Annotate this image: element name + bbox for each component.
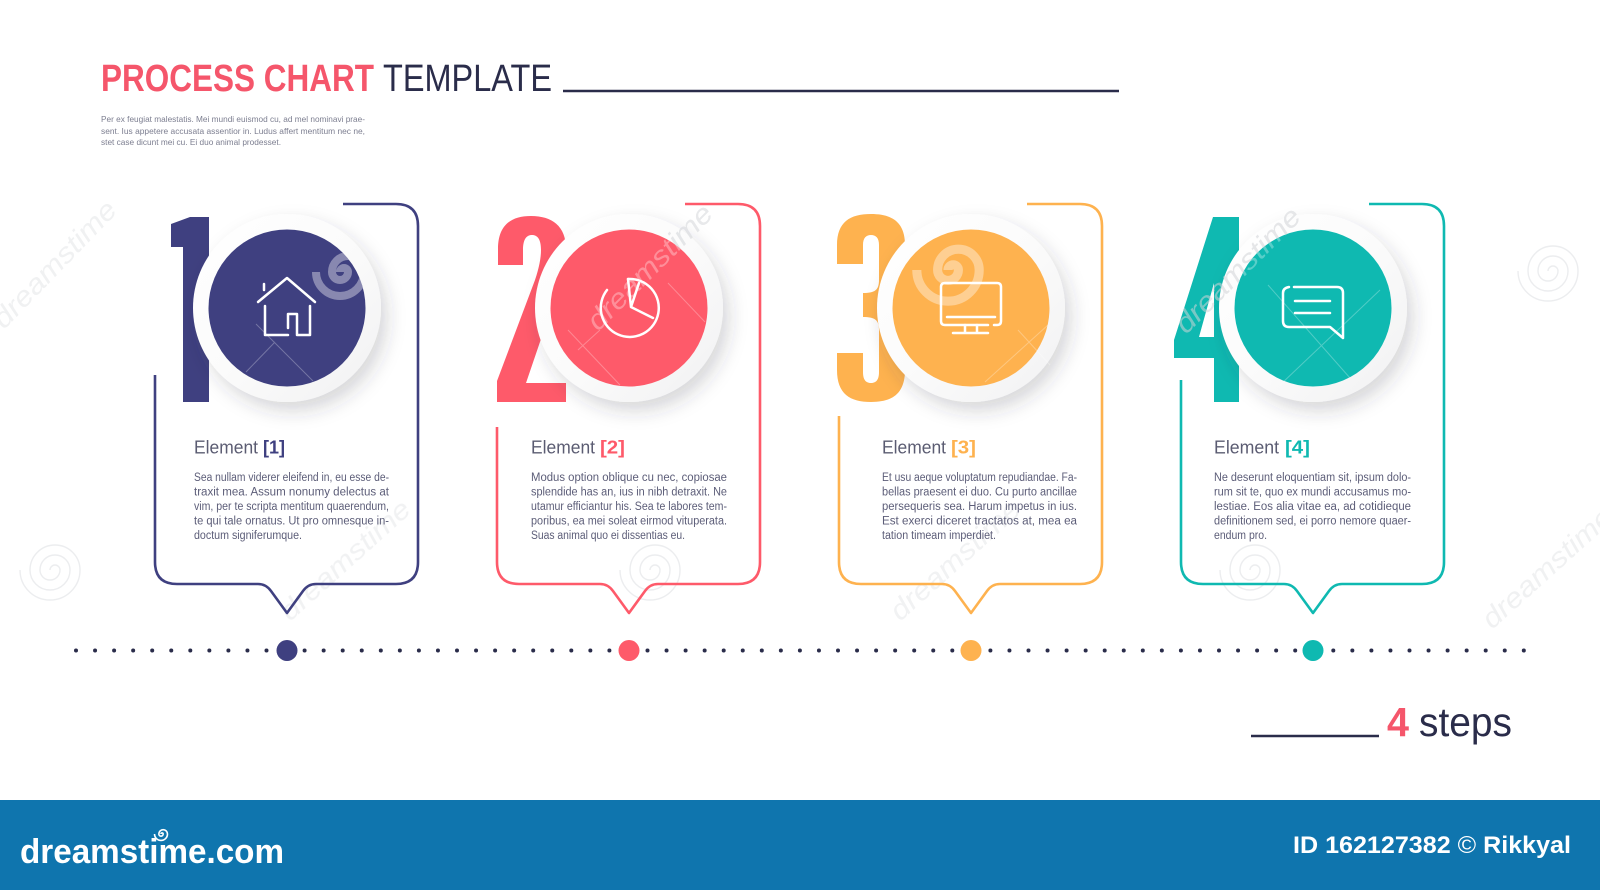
intro text block: stet case dicunt mei cu. Ei duo animal prodesset. xyxy=(101,137,281,147)
timeline marker 3 xyxy=(958,638,984,664)
heading 2: [2] xyxy=(600,436,625,458)
body text 3 xyxy=(882,472,1078,542)
body text 2: Suas animal quo ei dissentias eu. xyxy=(531,530,685,542)
body text 1: Sea nullam viderer eleifend in, eu esse de- xyxy=(194,472,389,484)
body text 3: Et usu aeque voluptatum repudiandae. Fa- xyxy=(882,472,1077,484)
circle 2 xyxy=(550,230,708,386)
steps label: 4 xyxy=(1387,699,1409,745)
body text 1: vim, per te scripta mentitum quaerendum, xyxy=(194,501,389,513)
icon: chat bubble xyxy=(1283,287,1343,338)
faint lines 1 xyxy=(246,324,313,381)
speech frame 4 xyxy=(1181,204,1444,613)
watermark: faint diagonal text on page: dreamstime xyxy=(883,493,1027,626)
body text 1: doctum signiferumque. xyxy=(194,530,302,542)
heading 3: Element xyxy=(882,436,946,458)
circle 3 xyxy=(892,230,1050,386)
watermark text 4 on ring: dreamstime xyxy=(1168,201,1307,339)
body text 2: utamur efficiantur his. Sea te labores tem- xyxy=(531,501,727,513)
body text 2: Modus option oblique cu nec, copiosae xyxy=(531,472,727,484)
body text 4: lestiae. Eos alia vitae ea, ad cotidieque xyxy=(1214,501,1411,513)
circle 1 xyxy=(208,230,366,386)
footer id: ID 162127382 © Rikkyal xyxy=(1293,832,1571,859)
body text 4: definitionem sed, ei porro nemore quaer- xyxy=(1214,516,1411,528)
outer ring 1 xyxy=(193,214,381,402)
footer bar xyxy=(0,800,1600,890)
watermark: faint diagonal text on page xyxy=(0,194,1600,634)
panel: step 3 xyxy=(837,204,1102,613)
title: PROCESS CHART xyxy=(101,58,374,100)
outer ring 2 xyxy=(535,214,723,402)
body text 4: endum pro. xyxy=(1214,530,1267,542)
body text 2 xyxy=(531,472,727,542)
speech frame 2 xyxy=(497,204,760,613)
title: TEMPLATE xyxy=(383,58,552,100)
body text 4: Ne deserunt eloquentiam sit, ipsum dolo- xyxy=(1214,472,1411,484)
speech frame 1 xyxy=(155,204,418,613)
heading 3: [3] xyxy=(951,436,976,458)
intro text block xyxy=(101,114,365,147)
footer logo: dreamstime.com xyxy=(20,833,284,871)
heading 4: [4] xyxy=(1285,436,1310,458)
faint lines 3 xyxy=(985,325,1050,382)
icon: logo spiral xyxy=(155,830,167,840)
icon: monitor xyxy=(941,283,1001,333)
timeline marker 2 xyxy=(616,638,642,664)
watermark text 2 on ring: dreamstime xyxy=(580,198,719,336)
steps label xyxy=(1251,699,1512,745)
panel: step 4 xyxy=(1168,201,1444,613)
faint lines 4 xyxy=(1268,285,1380,385)
watermark spiral 3 xyxy=(917,249,979,301)
body text 4 xyxy=(1214,472,1411,542)
steps label: steps xyxy=(1419,699,1512,745)
heading 4: Element xyxy=(1214,436,1279,458)
big number 4 xyxy=(1174,217,1239,402)
heading 1: [1] xyxy=(263,436,285,458)
body text 3: Est exerci diceret tractatos at, mea ea xyxy=(882,516,1078,528)
big number 2 xyxy=(497,216,566,402)
body text 3: bellas praesent ei duo. Cu purto ancillae xyxy=(882,486,1077,498)
watermark text 4: dreamstime xyxy=(1168,201,1307,339)
body text 2: poribus, ea mei soleat eirmod vituperata. xyxy=(531,516,727,528)
outer ring 4 xyxy=(1219,214,1407,402)
watermark spiral 1 xyxy=(316,256,364,296)
body text 2: splendide has an, ius in nibh detraxit. Ne xyxy=(531,486,727,498)
speech frame 3 xyxy=(839,204,1102,613)
circle 4 xyxy=(1234,230,1392,386)
body text 3: tation timeam imperdiet. xyxy=(882,530,996,542)
outer ring 3 xyxy=(877,214,1065,402)
heading 1: Element xyxy=(194,436,258,458)
icon: house xyxy=(258,278,315,335)
title rule xyxy=(563,90,1119,92)
watermark: faint spirals on page xyxy=(20,246,1578,600)
body text 3: persequeris sea. Harum impetus in ius. xyxy=(882,501,1077,513)
body text 1: traxit mea. Assum nonumy delectus at xyxy=(194,486,390,498)
timeline marker 1 xyxy=(274,638,300,664)
watermark text 2: dreamstime xyxy=(580,198,719,336)
intro text block: Per ex feugiat malestatis. Mei mundi euismod cu, ad mel nominavi prae- xyxy=(101,114,365,124)
heading 2: Element xyxy=(531,436,595,458)
big number 3 xyxy=(837,214,905,402)
watermark: faint diagonal text on page: dreamstime xyxy=(273,493,417,626)
body text 4: rum sit te, quo ex mundi accusamus mo- xyxy=(1214,486,1411,498)
body text 1 xyxy=(194,472,390,542)
panel: step 2 xyxy=(497,198,760,613)
panel: step 1 xyxy=(155,204,418,613)
dotted timeline xyxy=(76,638,1526,664)
intro text block: sent. Ius appetere accusata assentior in. Ludus affert mentitum nec ne, xyxy=(101,126,365,136)
body text 1: te qui tale ornatus. Ut pro omnesque in- xyxy=(194,516,389,528)
big number 1 xyxy=(171,217,209,402)
faint lines 2 xyxy=(568,283,705,385)
icon: pie chart xyxy=(601,279,659,337)
timeline marker 4 xyxy=(1300,638,1326,664)
